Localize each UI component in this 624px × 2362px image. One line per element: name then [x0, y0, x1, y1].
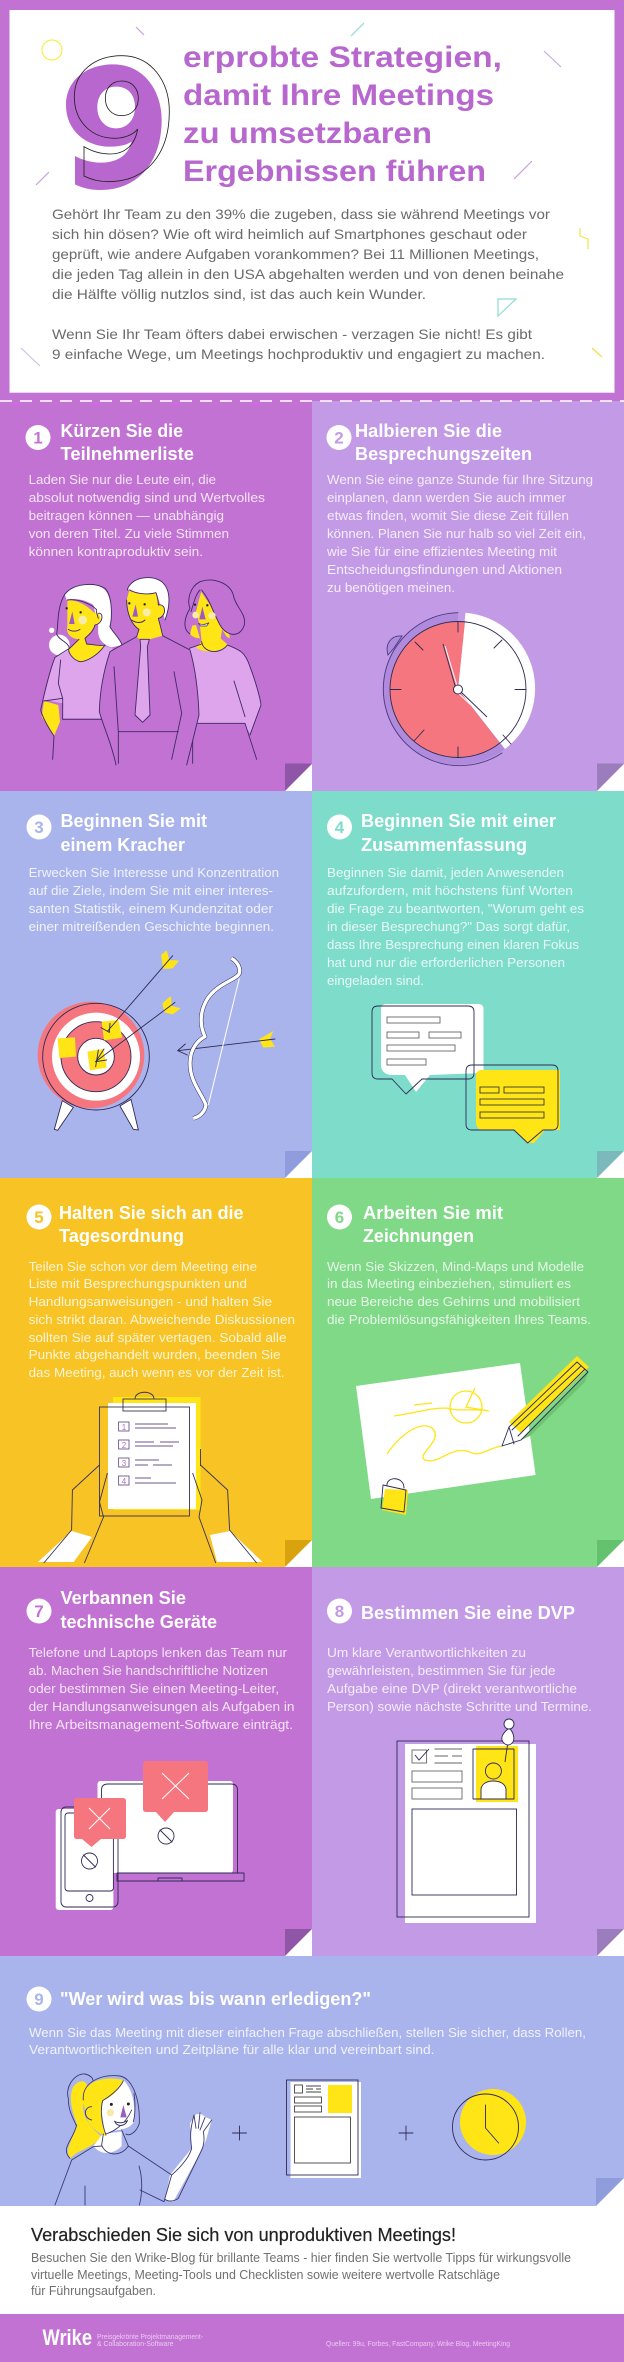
- body text 5: das Meeting, auch wenn es vor der Zeit ist.: [29, 1366, 284, 1380]
- intro text: Gehört Ihr Team zu den 39% die zugeben, dass sie während Meetings vor: [52, 206, 550, 222]
- title: Ergebnissen führen: [183, 155, 486, 188]
- body text 4: aufzufordern, mit höchstens fünf Worten: [327, 884, 573, 898]
- closing heading: Verabschieden Sie sich von unproduktiven Meetings!: [31, 2225, 456, 2245]
- body text 8: [327, 1646, 592, 1714]
- body text 7: der Handlungsanweisungen als Aufgaben in: [29, 1700, 295, 1714]
- number badge 7: [26, 1598, 52, 1624]
- number badge 8: [327, 1598, 352, 1624]
- heading 6: Zeichnungen: [363, 1226, 474, 1246]
- body text 3: Erwecken Sie Interesse und Konzentration: [29, 866, 279, 880]
- body text 4: eingeladen sind.: [327, 974, 424, 988]
- number badge 7: 7: [34, 1602, 44, 1621]
- number badge 1: [26, 425, 50, 450]
- number badge 2: 2: [334, 428, 344, 448]
- body text 9: Wenn Sie das Meeting mit dieser einfachen Frage abschließen, stellen Sie sicher, dass Rollen,: [29, 2026, 586, 2040]
- illustration: clipboard in hands: 3: [122, 1459, 127, 1468]
- body text 6: die Problemlösungsfähigkeiten Ihres Teams.: [327, 1313, 591, 1327]
- closing text: Besuchen Sie den Wrike-Blog für brillante Teams - hier finden Sie wertvolle Tipps für wirkungsvolle: [31, 2251, 571, 2265]
- logo tagline: & Collaboration-Software: [97, 2341, 174, 2348]
- illustration: clipboard in hands: 1: [122, 1423, 127, 1432]
- body text 8: Person) sowie nächste Schritte und Termine.: [327, 1700, 592, 1714]
- number badge 3: 3: [34, 818, 44, 837]
- panel: tip 2: [312, 401, 624, 791]
- intro text: die Hälfte völlig nutzlos sind, ist das auch kein Wunder.: [52, 286, 426, 302]
- heading 1: [60, 421, 194, 464]
- logo: Wrike: Wrike: [42, 2325, 92, 2350]
- title: zu umsetzbaren: [183, 117, 432, 150]
- dashed divider: [0, 400, 624, 402]
- number badge 6: [327, 1204, 352, 1230]
- body text 7: Ihre Arbeitsmanagement-Software einträgt.: [29, 1718, 293, 1732]
- heading 4: Zusammenfassung: [361, 835, 527, 855]
- intro text: die jeden Tag allein in den USA abgehalten werden und von denen beinahe: [52, 266, 564, 282]
- illustration: target with arrows and bow: [38, 950, 275, 1130]
- number badge 1: 1: [33, 428, 43, 448]
- body text 8: Aufgabe eine DVP (direkt verantwortliche: [327, 1682, 577, 1696]
- illustration: clipboard in hands: [38, 1392, 263, 1563]
- title: damit Ihre Meetings: [183, 79, 494, 112]
- body text 1: können kontraproduktiv sein.: [29, 545, 203, 559]
- heading 4: [361, 811, 556, 855]
- heading 7: technische Geräte: [60, 1612, 217, 1632]
- panel: tip 3: [0, 791, 312, 1178]
- man: [99, 578, 199, 765]
- body text 5: Liste mit Besprechungspunkten und: [29, 1277, 247, 1291]
- logo tagline: Preisgekrönte Projektmanagement-: [97, 2334, 204, 2341]
- illustration: three people: [41, 578, 261, 765]
- body text 5: Punkte abgehandelt wurden, beenden Sie: [29, 1348, 281, 1362]
- intro text: [52, 206, 564, 362]
- illustration: yellow clock: [452, 2089, 526, 2160]
- left woman: [41, 584, 122, 763]
- body text 3: auf die Ziele, indem Sie mit einer interes-: [29, 884, 273, 898]
- heading 3: [60, 811, 207, 855]
- heading 5: Halten Sie sich an die: [59, 1203, 244, 1223]
- panel: tip 1: [0, 401, 312, 791]
- body text 1: [29, 473, 265, 559]
- body text 2: einplanen, dann werden Sie auch immer: [327, 491, 566, 505]
- illustration: stopwatch: [383, 613, 535, 766]
- panel: tip 5: [0, 1178, 312, 1567]
- panel: intro header: [10, 10, 614, 393]
- intro text: Wenn Sie Ihr Team öfters dabei erwischen - verzagen Sie nicht! Es gibt: [52, 326, 532, 342]
- body text 2: können. Planen Sie nur halb so viel Zeit ein,: [327, 527, 586, 541]
- body text 5: Teilen Sie schon vor dem Meeting eine: [29, 1260, 257, 1274]
- body text 7: ab. Machen Sie handschriftliche Notizen: [29, 1664, 268, 1678]
- panel: tip 8: [312, 1567, 624, 1956]
- heading 2: [355, 421, 532, 464]
- panel: tip 9: [0, 1956, 624, 2206]
- body text 7: [29, 1646, 295, 1732]
- illustration: document with pinned photo: [397, 1719, 536, 1923]
- body text 6: neue Bereiche des Gehirns und mobilisiert: [327, 1295, 581, 1309]
- closing section: [31, 2225, 571, 2298]
- panel: tip 6: [312, 1178, 624, 1567]
- intro text: sich hin dösen? Wie oft wird heimlich auf Smartphones geschaut oder: [52, 226, 527, 242]
- closing text: [31, 2251, 571, 2298]
- number badge 4: [327, 814, 352, 840]
- body text 5: sich strikt daran. Abweichende Diskussionen: [29, 1313, 295, 1327]
- heading 7: [60, 1588, 217, 1632]
- heading 1: Teilnehmerliste: [60, 444, 194, 464]
- icon: plus: [232, 2126, 246, 2140]
- illustration: clipboard in hands: 2: [122, 1441, 127, 1450]
- body text 7: Telefone und Laptops lenken das Team nur: [29, 1646, 287, 1660]
- body text 6: in das Meeting einbeziehen, stimuliert es: [327, 1277, 571, 1291]
- number badge 9: 9: [34, 1990, 44, 2009]
- heading 2: Halbieren Sie die: [355, 421, 502, 441]
- number badge 4: 4: [335, 818, 345, 837]
- title: erprobte Strategien,: [183, 41, 502, 74]
- panel: tip 7: [0, 1567, 312, 1956]
- illustration: speech bubbles: [372, 1004, 560, 1143]
- body text 1: beitragen können — unabhängig: [29, 509, 224, 523]
- number badge 9: [26, 1986, 52, 2012]
- number badge 8: 8: [335, 1602, 344, 1621]
- body text 6: [327, 1260, 591, 1327]
- closing text: virtuelle Meetings, Meeting-Tools und Checklisten sowie weitere wertvolle Ratschläge: [31, 2268, 500, 2282]
- illustration: waving woman: [55, 2074, 212, 2205]
- body text 4: hat und nur die erforderlichen Personen: [327, 956, 565, 970]
- body text 9: Verantwortlichkeiten und Zeitpläne für alle klar und vereinbart sind.: [29, 2043, 434, 2057]
- footer: [0, 2314, 624, 2362]
- heading 6: [363, 1203, 503, 1246]
- body text 1: absolut notwendig sind und Wertvolles: [29, 491, 265, 505]
- body text 2: [326, 473, 593, 595]
- logo tagline: [97, 2334, 204, 2348]
- body text 3: einer mitreißenden Geschichte beginnen.: [29, 920, 274, 934]
- heading 7: Verbannen Sie: [60, 1588, 186, 1608]
- illustration: phone and laptop: [56, 1761, 244, 1910]
- closing text: für Führungsaufgaben.: [31, 2284, 156, 2298]
- body text 5: Handlungsanweisungen - und halten Sie: [29, 1295, 272, 1309]
- body text 9: [29, 2026, 586, 2057]
- heading 8: Bestimmen Sie eine DVP: [361, 1603, 575, 1623]
- intro text: geprüft, wie andere Aufgaben vorankommen? Bei 11 Millionen Meetings,: [52, 246, 539, 262]
- number badge 6: 6: [335, 1208, 344, 1227]
- heading 3: einem Kracher: [60, 835, 185, 855]
- body text 4: Beginnen Sie damit, jeden Anwesenden: [327, 866, 564, 880]
- body text 3: santen Statistik, einem Kundenzitat oder: [29, 902, 273, 916]
- body text 5: sollten Sie auf später vertagen. Sobald alle: [29, 1331, 287, 1345]
- heading 1: Kürzen Sie die: [60, 421, 183, 441]
- body text 4: in dieser Besprechung?" Das sorgt dafür,: [327, 920, 570, 934]
- body text 7: oder bestimmen Sie einen Meeting-Leiter,: [29, 1682, 279, 1696]
- body text 1: von deren Titel. Zu viele Stimmen: [29, 527, 229, 541]
- illustration: small document: [286, 2080, 361, 2178]
- body text 1: Laden Sie nur die Leute ein, die: [29, 473, 216, 487]
- body text 3: [29, 866, 279, 934]
- right woman: [185, 580, 261, 763]
- body text 2: Entscheidungsfindungen und Aktionen: [327, 563, 562, 577]
- number badge 3: [26, 814, 52, 840]
- body text 2: etwas finden, womit Sie diese Zeit füllen: [327, 509, 569, 523]
- title: [183, 41, 502, 188]
- body text 2: wie Sie für eine effizientes Meeting mit: [326, 545, 558, 559]
- number badge 5: [26, 1204, 52, 1230]
- number badge 2: [326, 425, 352, 450]
- body text 5: [29, 1260, 295, 1380]
- body text 4: dass Ihre Besprechung einen klaren Fokus: [327, 938, 579, 952]
- heading 9: "Wer wird was bis wann erledigen?": [60, 1989, 371, 2009]
- body text 8: Um klare Verantwortlichkeiten zu: [327, 1646, 526, 1660]
- body text 2: zu benötigen meinen.: [327, 581, 455, 595]
- intro text: 9 einfache Wege, um Meetings hochproduktiv und engagiert zu machen.: [52, 346, 545, 362]
- body text 2: Wenn Sie eine ganze Stunde für Ihre Sitzung: [327, 473, 593, 487]
- number badge 5: 5: [34, 1208, 44, 1227]
- panel: tip 4: [312, 791, 624, 1178]
- heading 5: [59, 1203, 244, 1246]
- big number 9: [66, 56, 169, 190]
- illustration: paper, pencil and eraser: [356, 1356, 589, 1515]
- icon: plus: [399, 2126, 413, 2140]
- heading 6: Arbeiten Sie mit: [363, 1203, 503, 1223]
- heading 2: Besprechungszeiten: [355, 444, 532, 464]
- heading 5: Tagesordnung: [59, 1226, 184, 1246]
- body text 6: Wenn Sie Skizzen, Mind-Maps und Modelle: [327, 1260, 584, 1274]
- heading 3: Beginnen Sie mit: [60, 811, 207, 831]
- body text 4: die Frage zu beantworten, "Worum geht es: [327, 902, 584, 916]
- body text 8: gewährleisten, bestimmen Sie für jede: [327, 1664, 556, 1678]
- illustration: clipboard in hands: 4: [122, 1477, 127, 1486]
- heading 4: Beginnen Sie mit einer: [361, 811, 556, 831]
- body text 4: [327, 866, 584, 988]
- sources: Quellen: 99u, Forbes, FastCompany, Wrike Blog, MeetingKing: [326, 2341, 510, 2348]
